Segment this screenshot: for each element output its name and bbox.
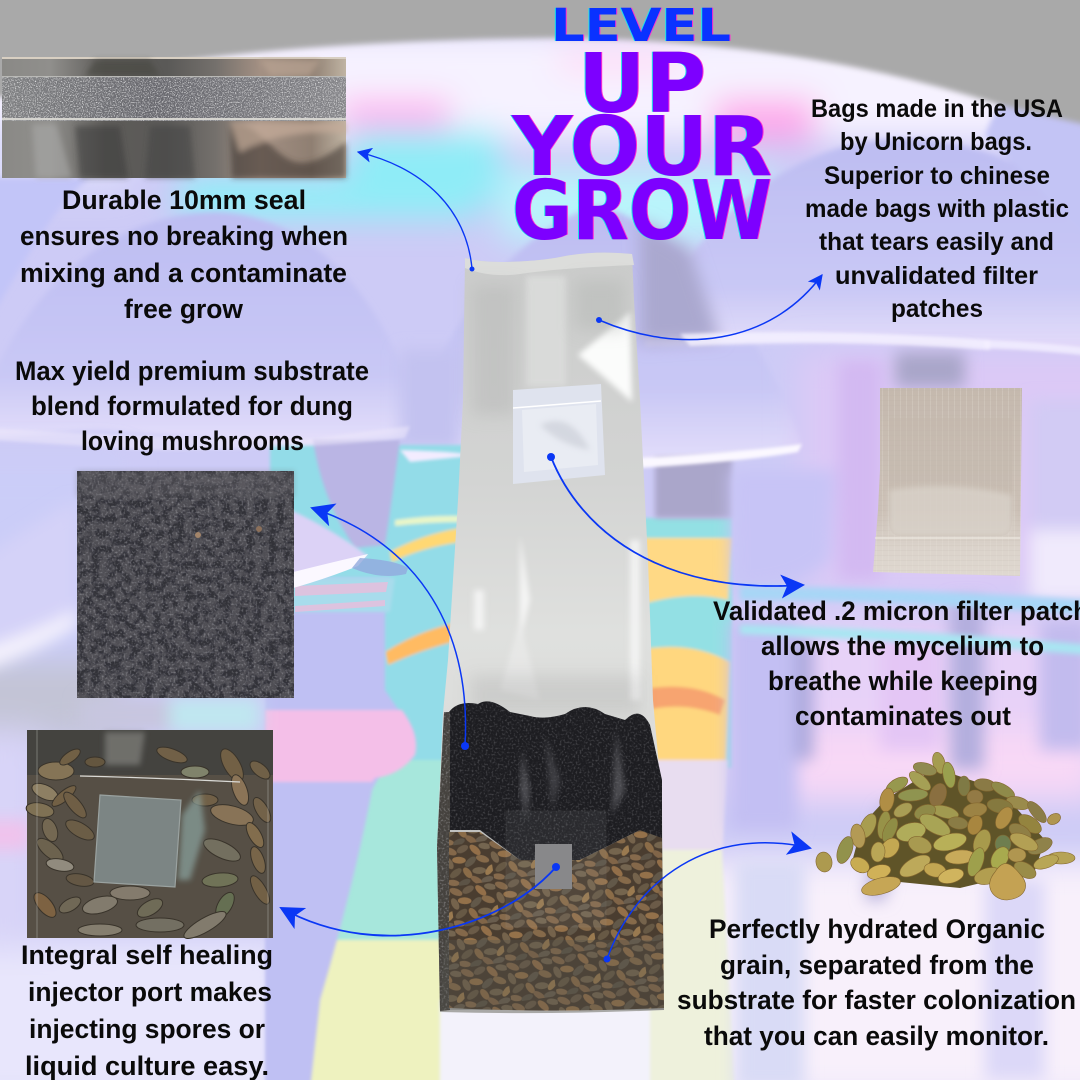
- title word: LEVEL: LEVEL: [550, 0, 730, 52]
- title word: LEVEL: LEVEL: [552, 0, 732, 52]
- text: seal caption: free grow: [124, 294, 244, 324]
- product: grow bag: [437, 253, 664, 1013]
- background: left edge stems behind photos: [0, 500, 260, 850]
- bag body: [437, 253, 664, 1013]
- title words: UP YOUR GROW: GROW: [513, 164, 773, 259]
- background: left small cap: [262, 498, 368, 592]
- photo: substrate soil: [77, 471, 294, 698]
- text: USA-made bags caption: Superior to chinese: [824, 162, 1050, 190]
- arrow: bag material callout: [596, 275, 822, 340]
- text: grain caption: substrate for faster colonization: [677, 985, 1076, 1015]
- background: gray behind center cap: [655, 456, 732, 518]
- text: USA-made bags caption: by Unicorn bags.: [840, 128, 1032, 156]
- text: injector caption: Integral self healing: [21, 940, 273, 970]
- text: substrate caption: blend formulated for dung: [31, 391, 353, 421]
- text: filter patch caption: breathe while keeping: [768, 666, 1038, 696]
- text: grain caption: Perfectly hydrated Organic: [709, 914, 1045, 944]
- text: seal caption: mixing and a contaminate: [20, 258, 347, 288]
- text: USA-made bags caption: unvalidated filter: [835, 262, 1038, 290]
- title words: UP YOUR GROW: UP: [579, 37, 707, 132]
- title words: UP YOUR GROW: YOUR: [510, 100, 771, 195]
- grain layer: [449, 830, 664, 1010]
- text: injector caption: injecting spores or: [29, 1014, 265, 1044]
- title word: LEVEL: LEVEL: [551, 0, 731, 52]
- text: USA-made bags caption: patches: [891, 295, 983, 323]
- title words: UP YOUR GROW: GROW: [511, 164, 771, 259]
- background: right stems: [730, 352, 1080, 1080]
- background: cyan band behind filter caption: [740, 586, 1080, 616]
- background: cap rims: [0, 332, 1080, 468]
- bag gusset folds and highlights: [470, 276, 640, 715]
- bag top seal: [465, 253, 634, 275]
- arrow: substrate callout: [312, 508, 469, 750]
- substrate layer: [437, 701, 662, 1011]
- text: grain caption: grain, separated from the: [720, 950, 1034, 980]
- seal band: [2, 76, 346, 121]
- text: injector caption: [21, 940, 273, 1080]
- text: seal caption: [20, 185, 348, 324]
- text: substrate caption: loving mushrooms: [81, 426, 304, 456]
- photo: injector port on grain: [25, 730, 274, 943]
- text: injector caption: injector port makes: [28, 977, 272, 1007]
- bag filter patch: [513, 384, 605, 484]
- text: filter patch caption: allows the mycelium to: [761, 631, 1044, 661]
- title words: UP YOUR GROW: UP: [577, 37, 705, 132]
- background: lower swirl and stems: [0, 332, 1080, 1080]
- gray injector square: [94, 795, 181, 887]
- photo: 10mm seal close-up: [2, 57, 346, 178]
- title words: UP YOUR GROW: [510, 37, 773, 259]
- background: cyan and yellow swirl behind bag: [270, 445, 735, 1080]
- background: darker gills behind right cap: [400, 220, 720, 450]
- text: USA-made bags caption: [805, 95, 1069, 323]
- background: iridescent cap and sky colours: [0, 30, 1080, 240]
- text: substrate caption: [15, 356, 369, 456]
- text: grain caption: that you can easily monitor.: [704, 1021, 1049, 1051]
- background: left lower stem: [313, 440, 400, 548]
- text: seal caption: ensures no breaking when: [20, 221, 348, 251]
- arrow: grain callout: [604, 843, 810, 962]
- arrow: seal callout: [358, 152, 474, 272]
- arrow: injector callout: [281, 863, 560, 936]
- title: Level Up Your Grow: [510, 0, 773, 259]
- photo: filter patch: [873, 388, 1022, 576]
- text: USA-made bags caption: Bags made in the USA: [811, 95, 1063, 123]
- title words: UP YOUR GROW: YOUR: [511, 100, 772, 195]
- title words: UP YOUR GROW: GROW: [512, 164, 772, 259]
- title words: UP YOUR GROW: UP: [578, 37, 706, 132]
- text: seal caption: Durable 10mm seal: [62, 185, 306, 215]
- arrow: filter patch callout: [547, 453, 803, 586]
- injector patch window: [506, 811, 606, 927]
- background: mushroom caps: [0, 0, 1080, 470]
- text: USA-made bags caption: that tears easily and: [819, 228, 1054, 256]
- photo: grain pile: [814, 751, 1075, 900]
- background: gray sky band: [0, 0, 1080, 128]
- text: filter patch caption: [713, 596, 1080, 731]
- text: USA-made bags caption: made bags with plastic: [805, 195, 1069, 223]
- text: grain caption: [677, 914, 1076, 1051]
- text: substrate caption: Max yield premium substrate: [15, 356, 369, 386]
- title words: UP YOUR GROW: YOUR: [512, 100, 773, 195]
- text: filter patch caption: contaminates out: [795, 701, 1011, 731]
